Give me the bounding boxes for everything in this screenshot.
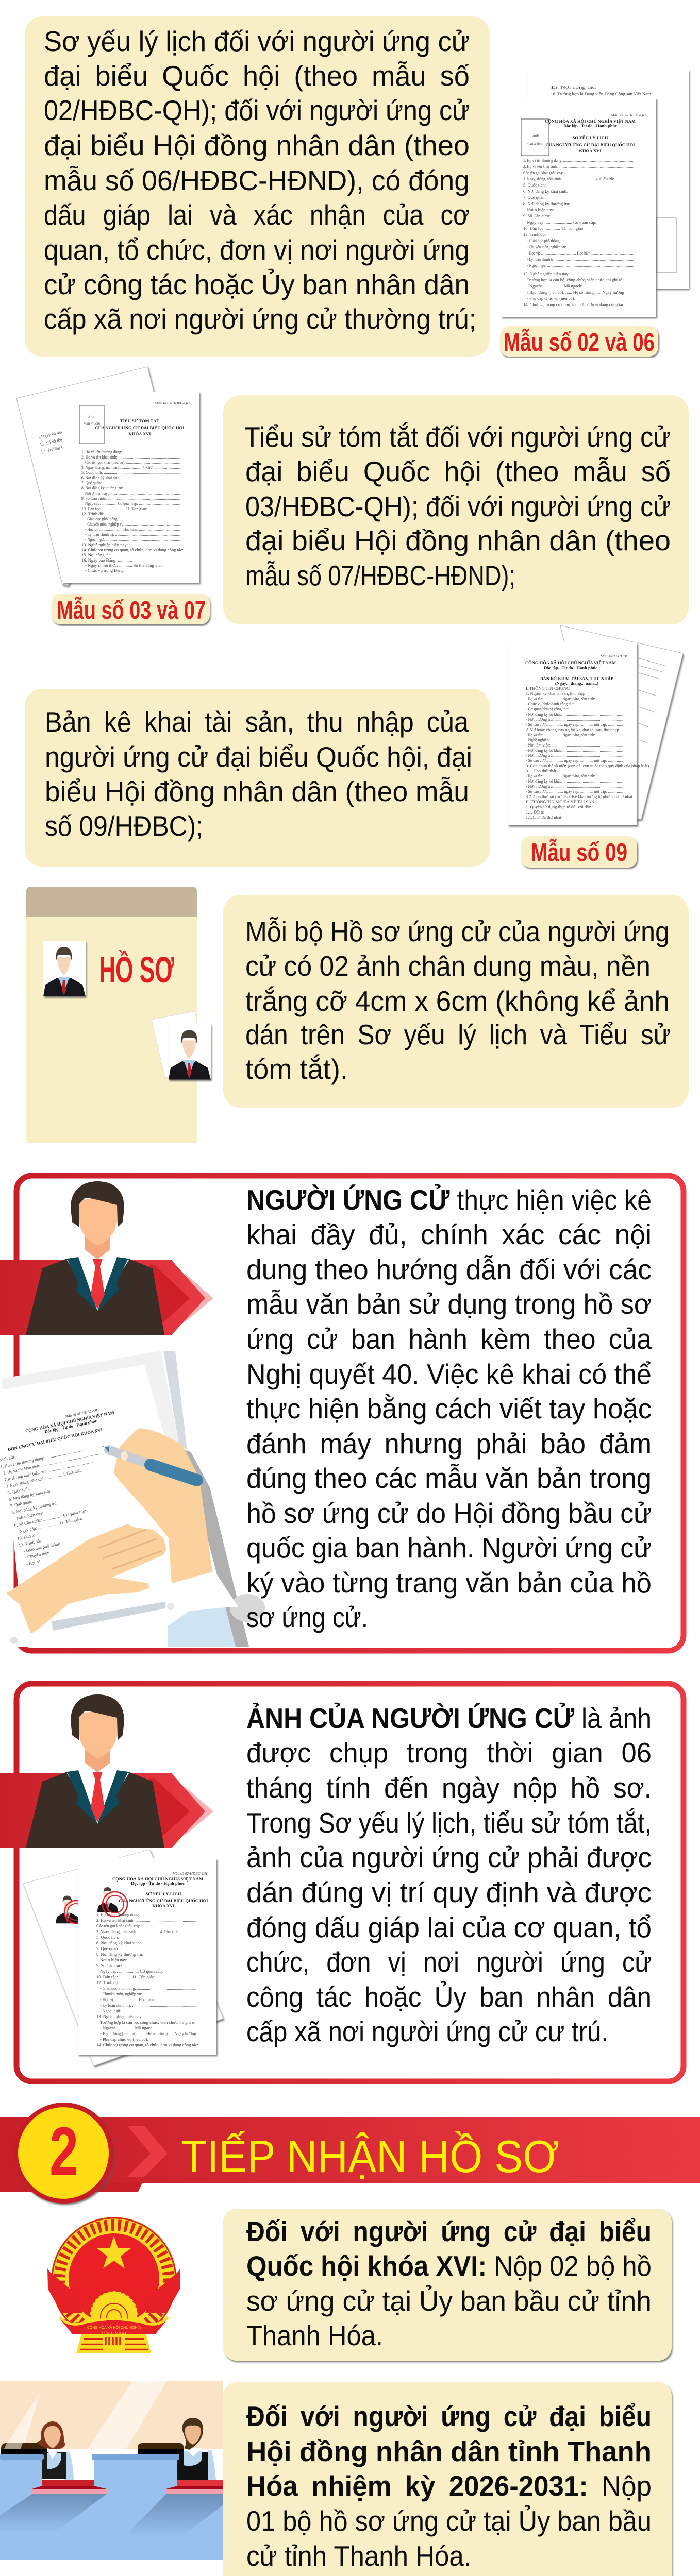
panel: doi voi dai bieu hoi dong nhan dan: 01 bộ hồ sơ ứng cử tại Ủy ban bầu bbox=[246, 2505, 652, 2537]
panel: so yeu ly lich text: quan, tổ chức, đơn vị nơi người ứng bbox=[44, 234, 470, 266]
document: stamped form with photo: Độc lập - Tự do - Hạnh phúc bbox=[131, 1880, 185, 1886]
document: mau so 03 va 07: - Ngày và tên thường bbox=[38, 426, 76, 440]
document: mau so 03 va 07: 15. Số và tên thường bbox=[39, 433, 76, 447]
document: mau so 02 va 06: - Chuyên môn, nghiệp vụ: ....................................................................... bbox=[527, 244, 634, 249]
icon: hand signing document: 7. Quê quán: bbox=[10, 1499, 33, 1509]
panel: tieu su tom tat text: mẫu số 07/HĐBC-HĐND); bbox=[245, 560, 515, 591]
document: mau so 03 va 07: 10. Dân tộc: ...................... 11. Tôn giáo: ............................... bbox=[81, 506, 180, 511]
document: mau so 09: Độc lập - Tự do - Hạnh phúc bbox=[544, 665, 597, 670]
text: nguoi ung cu: thực hiện bằng cách viết tay hoặc bbox=[246, 1393, 652, 1425]
document: mau so 02 va 06: 2. Họ và tên khai sinh: ............................................................................... bbox=[523, 164, 634, 169]
panel: anh cua nguoi ung cu: chức, đơn vị nơi người ứng cử bbox=[246, 1946, 652, 1978]
text: nguoi ung cu: đúng theo các mẫu văn bản trong bbox=[246, 1462, 652, 1494]
panel: doi voi dai bieu quoc hoi: Đối với người ứng cử đại biểu bbox=[246, 2215, 652, 2247]
document: stamped form with photo: 5. Quốc tịch: bbox=[96, 1935, 119, 1940]
document: mau so 09: (Ngày... tháng... năm...) bbox=[555, 681, 598, 686]
panel: anh cua nguoi ung cu: ẢNH CỦA NGƯỜI ỨNG CỬ là ảnh bbox=[246, 1702, 652, 1734]
icon: hand signing document: - Chuyên môn bbox=[24, 1550, 51, 1560]
document: mau so 02 va 06: 15. Nơi công tác: bbox=[551, 84, 597, 90]
document: mau so 09: II. THÔNG TIN MÔ TẢ VỀ TÀI SẢN bbox=[526, 799, 594, 804]
document: mau so 02 va 06: - Lý luận chính trị: .................................................................................. bbox=[527, 257, 634, 262]
icon: national emblem bbox=[47, 2217, 180, 2353]
document: stamped form with photo: 9. Số Căn cước: bbox=[96, 1963, 124, 1968]
document: mau so 02 va 06: Ngày cấp: ........................ Cơ quan cấp: bbox=[527, 219, 596, 225]
panel: anh cua nguoi ung cu: cấp xã nơi người ứng cử cư trú. bbox=[246, 2015, 608, 2047]
text: nguoi ung cu: ký vào từng trang văn bản của hồ bbox=[246, 1567, 652, 1599]
document: stamped form with photo: 3. Ngày, tháng, năm sinh: ..................... 4. Giới tính: ................ bbox=[96, 1929, 196, 1934]
document: mau so 03 va 07: - Học vị: ........................ Học hàm: ........................................... bbox=[85, 527, 180, 532]
document: mau so 09: - Cơ quan/đơn vị công tác: ..................................................... bbox=[526, 706, 623, 711]
document: mau so 03 va 07: TIỂU SỬ TÓM TẮT bbox=[120, 418, 159, 423]
panel: so yeu ly lich text: đại biểu Hội đồng nhân dân (theo bbox=[44, 129, 470, 161]
document: mau so 02 va 06: 4cm x 6cm bbox=[527, 141, 544, 146]
document: stamped form with photo: 7. Quê quán: bbox=[96, 1946, 119, 1951]
clerk right bbox=[177, 2418, 216, 2480]
document: mau so 03 va 07: - Chuyên môn, nghiệp vụ: .......................................................... bbox=[85, 521, 180, 527]
panel: anh chan dung text: Mỗi bộ Hồ sơ ứng cử của người ứng bbox=[245, 916, 670, 947]
text: nguoi ung cu: mẫu văn bản sử dụng trong hồ sơ bbox=[246, 1288, 652, 1320]
document: mau so 02 va 06: 13. Nghề nghiệp hiện nay: bbox=[523, 271, 570, 276]
text: nguoi ung cu: ứng cử ban hành kèm theo của bbox=[246, 1323, 652, 1355]
icon: ho so folder: HỒ SƠ bbox=[99, 950, 174, 991]
panel: tieu su tom tat text: 03/HĐBC-QH); đối với người ứng cử bbox=[245, 490, 671, 522]
document: stamped form with photo: - Học vị: ...................... Học hàm: ........................................ bbox=[100, 1997, 196, 2002]
document: mau so 03 va 07: KHÓA XVI bbox=[128, 431, 151, 436]
document: mau so 09: - Họ và tên: ................... Ngày tháng năm sinh: ............................. bbox=[526, 696, 623, 701]
panel: anh chan dung text: trắng cỡ 4cm x 6cm (không kể ảnh bbox=[245, 985, 670, 1017]
document: mau so 02 va 06: 9. Số Căn cước: bbox=[523, 213, 551, 218]
text: nguoi ung cu: khai đầy đủ, chính xác các nội bbox=[246, 1218, 652, 1250]
icon: hand signing document: 3. Ngày, tháng, năm sinh: ................ 4. Giới tính: bbox=[6, 1468, 82, 1489]
document: mau so 03 va 07: - Lý luận chính trị: ................................................................... bbox=[85, 532, 180, 537]
text: nguoi ung cu: quốc gia ban hành. Người ứng cử bbox=[246, 1532, 652, 1564]
document: mau so 02 va 06: - Giáo dục phổ thông: ........................................................................... bbox=[527, 238, 634, 243]
document: mau so 03 va 07: 12. Trình độ: bbox=[81, 511, 104, 516]
document: mau so 02 va 06: Các tên gọi khác (nếu có): .......................................................................... bbox=[523, 170, 634, 175]
panel: doi voi dai bieu quoc hoi: Thanh Hóa. bbox=[246, 2319, 383, 2351]
document: mau so 03 va 07: 15. Nơi công tác: bbox=[81, 552, 112, 557]
document: mau so 02 va 06: 3. Ngày, tháng, năm sinh: .................................. 4. Giới tính: .................... bbox=[523, 176, 634, 181]
label: mau so 03 va 07: Mẫu số 03 và 07 bbox=[57, 597, 206, 624]
label: mau so 02 va 06: Mẫu số 02 và 06 bbox=[504, 329, 655, 357]
panel: doi voi dai bieu quoc hoi bbox=[223, 2209, 672, 2361]
document: mau so 09: 2. Vợ hoặc chồng của người kê khai tài sản, thu nhập bbox=[526, 727, 619, 732]
icon: hand signing document: 8. Nơi đăng ký thường trú: bbox=[11, 1500, 58, 1515]
icon: reception desk with two clerks bbox=[0, 2381, 223, 2560]
document: stamped form with photo: SƠ YẾU LÝ LỊCH bbox=[146, 1891, 181, 1896]
text: nguoi ung cu: NGƯỜI ỨNG CỬ thực hiện việc kê bbox=[246, 1184, 652, 1216]
panel: so yeu ly lich text: mẫu số 06/HĐBC-HĐND), có đóng bbox=[44, 164, 470, 196]
text: nguoi ung cu: sơ ứng cử. bbox=[246, 1601, 368, 1633]
document: mau so 03 va 07: - Giáo dục phổ thông: ................................................................ bbox=[85, 516, 180, 521]
document: mau so 09: - Số căn cước: .............. ngày cấp: ............. nơi cấp: ............... bbox=[526, 789, 623, 794]
document: mau so 09: Mẫu số 09/HĐBC bbox=[600, 654, 629, 658]
panel: so yeu ly lich text: 02/HĐBC-QH); đối với người ứng cử bbox=[44, 94, 470, 126]
panel: tieu su tom tat text: đại biểu Quốc hội (theo mẫu số bbox=[245, 455, 671, 487]
section banner: 2 tiep nhan ho so bbox=[0, 2103, 700, 2204]
document: mau so 09: 3.2. Con thứ hai (trở lên): Kê khai tương tự như con thứ nhất. bbox=[526, 794, 634, 799]
icon: candidate bust bbox=[0, 1694, 213, 1848]
document: stamped form with photo: CỦA NGƯỜI ỨNG CỬ ĐẠI BIỂU QUỐC HỘI bbox=[119, 1898, 208, 1903]
section banner: 2 tiep nhan ho so: TIẾP NHẬN HỒ SƠ bbox=[181, 2131, 559, 2182]
document: stamped form with photo: - Bậc lương (nếu có): ...... Hệ số lương .... Ngày hưởng bbox=[100, 2031, 196, 2036]
document: mau so 02 va 06: SƠ YẾU LÝ LỊCH bbox=[573, 135, 608, 140]
panel: anh chan dung text bbox=[223, 895, 689, 1108]
panel: anh cua nguoi ung cu: Trong Sơ yếu lý lịch, tiểu sử tóm tắt, bbox=[246, 1807, 652, 1839]
icon: candidate bust bbox=[0, 1181, 213, 1335]
document: mau so 03 va 07: 13. Nghề nghiệp hiện nay: bbox=[81, 542, 128, 547]
document: mau so 09: BẢN KÊ KHAI TÀI SẢN, THU NHẬP bbox=[540, 676, 613, 681]
document: mau so 09: - Nơi làm việc: ...................................................................... bbox=[526, 742, 623, 748]
label: mau so 09: Mẫu số 09 bbox=[531, 839, 627, 867]
document: stamped form with photo: KHÓA XVI bbox=[152, 1903, 175, 1908]
document: mau so 02 va 06: 1. Họ và tên thường dùng: ............................................................................ bbox=[523, 158, 634, 163]
document: mau so 03 va 07: 16. Ngày vào Đảng: ............. bbox=[81, 557, 132, 563]
icon: hand signing document: Mẫu số 01/HĐBC-QH bbox=[64, 1407, 99, 1419]
document: mau so 02 va 06: Ảnh bbox=[532, 133, 539, 138]
panel: so yeu ly lich text: cử công tác hoặc Ủy ban nhân dân bbox=[44, 268, 470, 300]
document: mau so 09: 1. Quyền sử dụng thực tế đối với đất: bbox=[526, 804, 591, 809]
document: mau so 03 va 07: 14. Chức vụ trong cơ quan, tổ chức, đơn vị đang công tác: bbox=[81, 547, 184, 552]
document: mau so 03 va 07: 17. Trường hợp bản bbox=[40, 441, 76, 454]
document: mau so 02 va 06: - Phụ cấp chức vụ (nếu có): bbox=[527, 296, 575, 301]
icon: hand signing document: 12. Trình độ: bbox=[18, 1538, 41, 1548]
document: stamped form with photo: Nơi ở hiện nay: bbox=[100, 1957, 127, 1962]
text: nguoi ung cu: hồ sơ ứng cử do Hội đồng bầu cử bbox=[246, 1497, 652, 1529]
icon: hand signing document: Độc lập - Tự do - Hạnh phúc bbox=[44, 1418, 97, 1434]
document: mau so 09: - Số căn cước: .............. ngày cấp: ............. nơi cấp: ............... bbox=[526, 758, 623, 763]
document: mau so 09: 1. Người kê khai tài sản, thu nhập bbox=[526, 691, 585, 696]
panel: doi voi dai bieu quoc hoi: sơ ứng cử tại Ủy ban bầu cử tỉnh bbox=[246, 2285, 652, 2317]
document: mau so 09: - Nơi đăng ký hộ khẩu: ........................................................... bbox=[526, 778, 623, 784]
document: mau so 02 va 06: - Học vị: ...................................... Học hàm: ............................................. bbox=[527, 250, 634, 256]
document: mau so 03 va 07: 7. Quê quán: ............................................................................... bbox=[81, 480, 180, 485]
icon: hand signing document: 1. Họ và tên thường dùng: ........................................................ bbox=[0, 1443, 104, 1469]
document: mau so 02 va 06: - Ngạch: .................. Mã ngạch: bbox=[527, 283, 582, 289]
panel: ban ke khai tai san text bbox=[25, 689, 490, 867]
icon: hand signing document: Các tên gọi khác (nếu có): ................................................ bbox=[4, 1458, 96, 1482]
document: mau so 09 bbox=[508, 625, 683, 825]
document: mau so 02 va 06: 7. Quê quán: bbox=[523, 195, 546, 200]
document: stamped form with photo bbox=[23, 1850, 223, 2066]
document: mau so 09: - Nơi đăng ký hộ khẩu: ........................................................... bbox=[526, 711, 623, 717]
document: mau so 03 va 07: Nơi ở hiện nay: .......................................................................... bbox=[85, 490, 180, 496]
document: mau so 09: - Nơi đăng ký hộ khẩu: ........................................................... bbox=[526, 748, 623, 753]
panel: anh cua nguoi ung cu: dán đúng vị trí quy định và được bbox=[246, 1876, 652, 1908]
document: stamped form with photo: 6. Nơi đăng ký khai sinh: bbox=[96, 1940, 141, 1945]
document: mau so 03 va 07: 4cm x 6cm bbox=[84, 421, 101, 426]
document: mau so 03 va 07: Mẫu số 03-HĐBC-QH bbox=[154, 401, 190, 405]
document: stamped form with photo: Ngày cấp: .................. Cơ quan cấp: bbox=[100, 1969, 163, 1974]
document: stamped form with photo: Các tên gọi khác (nếu có): ..................................................... bbox=[96, 1923, 196, 1928]
panel: nguoi ung cu border bbox=[16, 1176, 684, 1651]
section banner: 2 tiep nhan ho so: 2 bbox=[49, 2113, 78, 2190]
icon: national emblem: CỘNG HÒA XÃ HỘI CHỦ NGHĨA bbox=[87, 2325, 141, 2330]
panel: so yeu ly lich text: cấp xã nơi người ứng cử thường trú; bbox=[44, 303, 476, 335]
document: mau so 09: 1.1. Đất ở: bbox=[526, 809, 544, 815]
document: stamped form with photo: 1. Họ và tên thường dùng: ...................................................... bbox=[96, 1912, 196, 1917]
document: mau so 09: 1.1.1. Thửa thứ nhất: bbox=[526, 815, 562, 820]
panel: tieu su tom tat text: đại biểu Hội đồng nhân dân (theo bbox=[245, 524, 671, 556]
panel: anh chan dung text: cử có 02 ảnh chân dung màu, nền bbox=[245, 950, 651, 982]
document: stamped form with photo: Trường hợp là cán bộ, công chức, viên chức, thì ghi rõ: bbox=[100, 2020, 197, 2025]
icon: hand signing document: - Giáo dục phổ thông bbox=[23, 1541, 61, 1553]
document: mau so 02 va 06: CỦA NGƯỜI ỨNG CỬ ĐẠI BIỂU QUỐC HỘI bbox=[545, 142, 635, 147]
document: mau so 02 va 06: Độc lập - Tự do - Hạnh phúc bbox=[563, 123, 617, 128]
document: mau so 02 va 06: Trường hợp là cán bộ, công chức, viên chức, thì ghi rõ: bbox=[527, 277, 624, 282]
icon: hand signing document: Ngày cấp: ................... 11. Tôn giáo: bbox=[19, 1516, 82, 1534]
document: mau so 09: - Nghề nghiệp: ....................................................................... bbox=[526, 737, 623, 742]
document: mau so 02 va 06: 14. Chức vụ trong cơ quan, tổ chức, đơn vị đang công tác: bbox=[523, 302, 625, 307]
panel: so yeu ly lich text: đại biểu Quốc hội (theo mẫu số bbox=[44, 60, 470, 92]
document: stamped form with photo: 2. Họ và tên khai sinh: .......................................................... bbox=[96, 1918, 196, 1923]
icon: hand signing document: CỘNG HÒA XÃ HỘI CHỦ NGHĨA VIỆT NAM bbox=[25, 1410, 114, 1434]
panel: anh cua nguoi ung cu: tháng tính đến ngày nộp hồ sơ. bbox=[246, 1772, 652, 1804]
clerk left bbox=[37, 2421, 74, 2480]
panel: ban ke khai tai san text: người ứng cử đại biểu Quốc hội, đại bbox=[45, 741, 472, 773]
document: mau so 03 va 07: CỦA NGƯỜI ỨNG CỬ ĐẠI BIỂU QUỐC HỘI bbox=[95, 425, 185, 430]
document: mau so 02 va 06 bbox=[501, 70, 689, 317]
document: stamped form with photo: CỘNG HÒA XÃ HỘI CHỦ NGHĨA VIỆT NAM bbox=[112, 1876, 203, 1882]
panel: anh cua nguoi ung cu: công tác hoặc Ủy ban nhân dân bbox=[246, 1981, 652, 2013]
icon: hand signing document: 9. Số Căn cước: .................. Cơ quan cấp: bbox=[14, 1508, 87, 1528]
document: stamped form with photo: - Giáo dục phổ thông: .......................................................... bbox=[100, 1986, 196, 1991]
document: mau so 09: - Họ và tên: ................... Ngày tháng năm sinh: ............................. bbox=[526, 732, 623, 737]
document: mau so 02 va 06: 12. Trình độ: bbox=[523, 232, 546, 237]
icon: hand signing document: 10. Dân tộc: bbox=[16, 1532, 39, 1541]
panel: doi voi dai bieu hoi dong nhan dan bbox=[223, 2382, 672, 2576]
panel: doi voi dai bieu hoi dong nhan dan: Hội đồng nhân dân tỉnh Thanh bbox=[246, 2435, 652, 2467]
panel: doi voi dai bieu hoi dong nhan dan: Hóa nhiệm kỳ 2026-2031: Nộp bbox=[246, 2470, 652, 2502]
document: mau so 09: 3. Con chưa thành niên (con đẻ, con nuôi theo quy định của pháp luật) bbox=[526, 763, 649, 768]
document: stamped form with photo: 12. Trình độ: bbox=[96, 1980, 119, 1985]
document: mau so 03 va 07: 9. Số Căn cước: ......................................................................... bbox=[81, 496, 180, 501]
document: mau so 02 va 06: Mẫu số 02/HĐBC-QH bbox=[610, 113, 646, 117]
icon: national emblem: VIỆT NAM bbox=[102, 2331, 126, 2337]
document: mau so 03 va 07: 2. Họ và tên khai sinh: .............................................................. bbox=[81, 454, 180, 460]
document: stamped form with photo: - Chuyên môn, nghiệp vụ: ..................................................... bbox=[100, 1991, 196, 1996]
document: mau so 09: - Họ và tên: ................... Ngày tháng năm sinh: ............................. bbox=[526, 773, 623, 778]
panel: anh chan dung text: tóm tắt). bbox=[245, 1053, 348, 1085]
icon: hand signing document: 6. Nơi đăng ký khai sinh: bbox=[8, 1487, 53, 1502]
document: stamped form with photo: Mẫu số 02/HĐBC-QH bbox=[172, 1871, 208, 1876]
icon: hand signing document: - Học vị bbox=[26, 1558, 41, 1567]
document: mau so 02 va 06: 10. Dân tộc: ............. 11. Tôn giáo: bbox=[523, 226, 585, 231]
document: mau so 09: - Số căn cước: .............. ngày cấp: ............. nơi cấp: ............... bbox=[526, 722, 623, 727]
icon: hand signing document: 5. Quốc tịch: bbox=[7, 1486, 30, 1495]
document: mau so 03 va 07: 5. Quốc tịch: .......................................................................... bbox=[81, 470, 180, 475]
document: mau so 02 va 06: CỘNG HÒA XÃ HỘI CHỦ NGHĨA VIỆT NAM bbox=[545, 118, 636, 124]
document: mau so 03 va 07: - Ngoại ngữ: ............................................................................. bbox=[85, 537, 180, 542]
panel: ban ke khai tai san text: Bản kê khai tài sản, thu nhập của bbox=[45, 706, 469, 738]
icon: hand signing document: Nơi ở hiện nay: bbox=[16, 1510, 44, 1521]
document: mau so 09: - Nơi thường trú: ................................................................... bbox=[526, 753, 623, 758]
icon: hand signing document bbox=[0, 1351, 265, 1647]
panel: anh cua nguoi ung cu: được chụp trong thời gian 06 bbox=[246, 1737, 652, 1769]
document: mau so 02 va 06: Nơi ở hiện nay: bbox=[527, 207, 554, 212]
document: mau so 02 va 06: 5. Quốc tịch: bbox=[523, 182, 546, 188]
text: nguoi ung cu bbox=[246, 1184, 652, 1633]
panel: anh cua nguoi ung cu bbox=[16, 1684, 684, 2081]
panel: so yeu ly lich text: dấu giáp lai và xác nhận của cơ bbox=[44, 199, 470, 231]
panel: doi voi dai bieu hoi dong nhan dan: cử tỉnh Thanh Hóa. bbox=[246, 2540, 471, 2572]
document: mau so 03 va 07: - Ngày chính thức: ..........., Số thẻ đảng viên: bbox=[85, 563, 164, 568]
document: mau so 03 va 07 bbox=[16, 367, 199, 586]
document: stamped form with photo: - Phụ cấp chức vụ (nếu có): bbox=[100, 2037, 148, 2042]
document: mau so 03 va 07: 1. Họ và tên thường dùng: ........................................................... bbox=[81, 449, 180, 454]
document: mau so 03 va 07: - Chức vụ trong Đảng: bbox=[85, 568, 125, 573]
document: mau so 03 va 07: 6. Nơi đăng ký khai sinh: ............................................................. bbox=[81, 475, 180, 480]
document: mau so 09: - Nơi thường trú: ................................................................... bbox=[526, 784, 623, 789]
text: nguoi ung cu: đánh máy nhưng phải bảo đảm bbox=[246, 1428, 652, 1460]
document: stamped form with photo: - Lý luận chính trị: .............................................................. bbox=[100, 2003, 196, 2008]
panel: ban ke khai tai san text: biểu Hội đồng nhân dân (theo mẫu bbox=[45, 775, 469, 807]
icon: hand signing document: 2. Họ và tên khai sinh: ......................................................... bbox=[3, 1450, 99, 1476]
panel: ban ke khai tai san text: số 09/HĐBC); bbox=[45, 810, 203, 842]
document: mau so 09: CỘNG HÒA XÃ HỘI CHỦ NGHĨA VIỆT NAM bbox=[525, 660, 616, 665]
document: mau so 03 va 07: Các tên gọi khác (nếu có): ........................................................ bbox=[85, 460, 180, 465]
panel: so yeu ly lich text bbox=[25, 16, 490, 357]
icon: ho so folder bbox=[26, 887, 211, 1143]
document: mau so 09: I. THÔNG TIN CHUNG bbox=[526, 686, 570, 691]
document: stamped form with photo: - Ngạch: ................ Mã ngạch bbox=[100, 2025, 153, 2030]
document: mau so 03 va 07: Ngày cấp: ................ Cơ quan cấp: ........................................... bbox=[85, 501, 180, 506]
document: mau so 02 va 06: 8. Nơi đăng ký thường trú: bbox=[523, 201, 570, 206]
document: mau so 03 va 07: 8. Nơi đăng ký thường trú: .......................................................... bbox=[81, 485, 180, 490]
document: mau so 02 va 06: 16. Trường hợp là Đảng viên Đảng Cộng sản Việt Nam bbox=[551, 91, 651, 96]
document: mau so 09: - Chức vụ/chức danh công tác: ................................................ bbox=[526, 701, 623, 706]
document: stamped form with photo: - Ngoại ngữ: ....................................................................... bbox=[100, 2008, 196, 2013]
panel: so yeu ly lich text: Sơ yếu lý lịch đối với người ứng cử bbox=[44, 25, 470, 57]
document: mau so 02 va 06: 6. Nơi đăng ký khai sinh: bbox=[523, 189, 568, 194]
text: nguoi ung cu: Nghị quyết 40. Việc kê khai có thể bbox=[246, 1358, 652, 1390]
document: mau so 09: 3.1. Con thứ nhất: bbox=[526, 768, 558, 773]
document: mau so 09: - Nơi thường trú: ................................................................... bbox=[526, 717, 623, 722]
document: mau so 03 va 07: 3. Ngày, tháng, năm sinh: .................... 4. Giới tính: .................. bbox=[81, 465, 180, 470]
document: mau so 02 va 06: - Ngoại ngữ: .......................................................................................... bbox=[527, 263, 634, 268]
document: stamped form with photo: 10. Dân tộc: ........... 11. Tôn giáo: bbox=[96, 1974, 156, 1979]
document: stamped form with photo: 14. Chức vụ trong cơ quan, tổ chức, đơn vị đang công tác: bbox=[96, 2042, 198, 2047]
icon: hand signing document: ĐƠN ỨNG CỬ ĐẠI BIỂU QUỐC HỘI KHÓA XVI bbox=[7, 1427, 103, 1452]
document: stamped form with photo: 8. Nơi đăng ký thường trú: bbox=[96, 1952, 143, 1957]
panel: doi voi dai bieu hoi dong nhan dan: Đối với người ứng cử đại biểu bbox=[246, 2400, 652, 2432]
panel: doi voi dai bieu quoc hoi: Quốc hội khóa XVI: Nộp 02 bộ hồ bbox=[246, 2250, 652, 2282]
document: stamped form with photo: 13. Nghề nghiệp hiện nay: bbox=[96, 2014, 143, 2019]
document: mau so 02 va 06: - Bậc lương (nếu có): ...... Hệ số lương ..... Ngày hưởng bbox=[527, 290, 625, 295]
panel: tieu su tom tat text: Tiểu sử tóm tắt đối với người ứng cử bbox=[244, 421, 671, 453]
panel: anh cua nguoi ung cu: ảnh của người ứng cử phải được bbox=[246, 1841, 652, 1873]
panel: tieu su tom tat text bbox=[223, 395, 689, 624]
document: mau so 03 va 07: Ảnh bbox=[88, 414, 94, 419]
text: nguoi ung cu: dung theo hướng dẫn đối với các bbox=[246, 1253, 652, 1285]
panel: anh cua nguoi ung cu: đóng dấu giáp lai của cơ quan, tổ bbox=[246, 1911, 652, 1943]
document: mau so 02 va 06: KHÓA XVI bbox=[579, 148, 602, 154]
